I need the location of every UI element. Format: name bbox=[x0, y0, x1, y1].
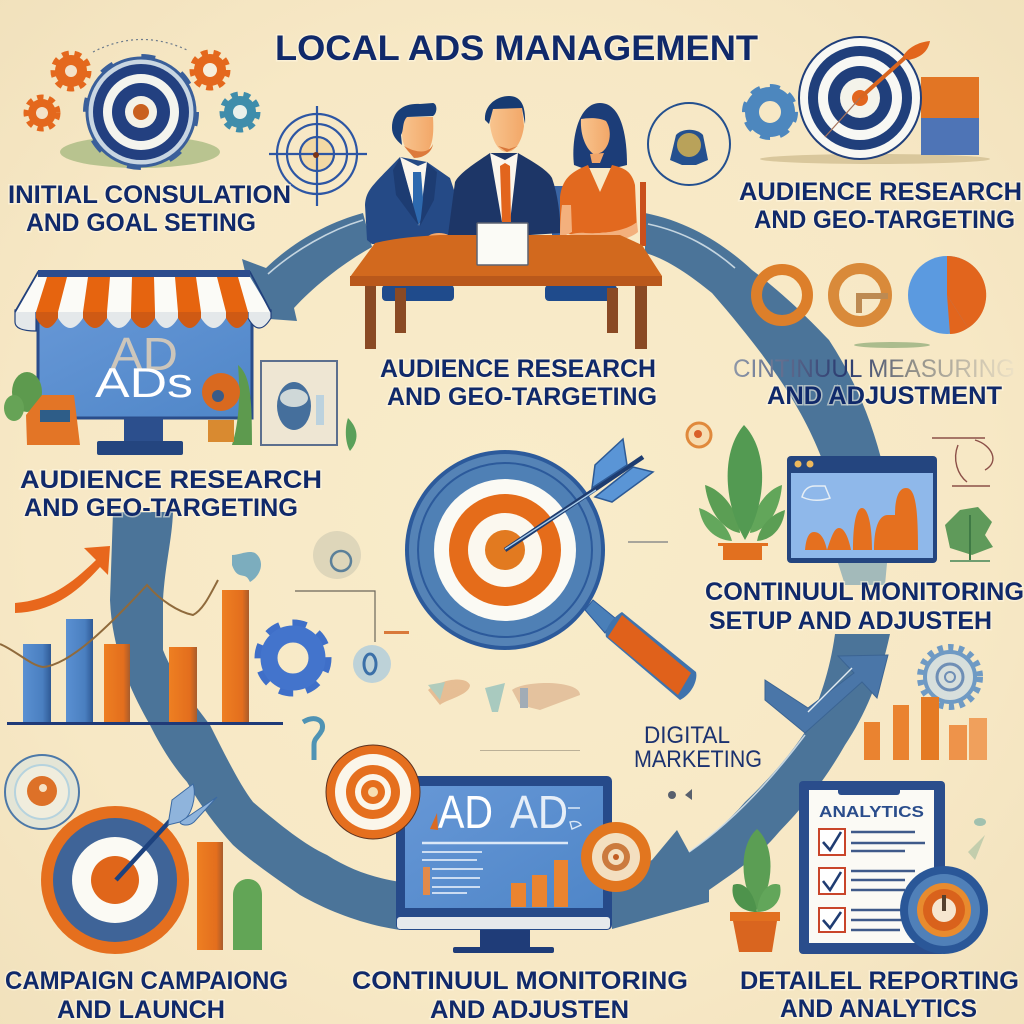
text: detailed reporting: DETAILEL REPORTING bbox=[740, 967, 1019, 995]
icon: small leaf bbox=[346, 418, 356, 451]
text: initial consultation: INITIAL CONSULATION bbox=[8, 181, 291, 209]
text: audience research left bbox=[20, 466, 322, 522]
text: continual monitoring bottom bbox=[352, 967, 688, 1024]
icon: monitor with area chart bbox=[787, 456, 937, 563]
icon: crosshair bbox=[269, 106, 367, 206]
icon: potted plant bbox=[699, 425, 785, 560]
icon: potted plant bottom bbox=[730, 829, 781, 952]
bar chart: growth bars with arrow bbox=[0, 546, 283, 725]
icon: central magnifier target bbox=[405, 439, 696, 700]
check items bbox=[819, 829, 925, 932]
illustration: storefront ads monitor: AD bbox=[110, 328, 178, 380]
illustration: ad monitor bbox=[396, 776, 612, 953]
text: digital marketing: MARKETING bbox=[634, 746, 762, 773]
text: audience research centre bbox=[380, 355, 657, 411]
text: detailed reporting: AND ANALYTICS bbox=[780, 995, 977, 1023]
icon: faint map marks bbox=[428, 680, 580, 751]
icon: check arrow bbox=[765, 655, 888, 733]
text: continual monitoring right bbox=[705, 578, 1024, 635]
icon: orange coin bbox=[581, 822, 651, 892]
text: campaign launch bbox=[5, 967, 288, 1024]
icon: orange eye badge bbox=[202, 365, 252, 445]
text: campaign launch: AND LAUNCH bbox=[57, 996, 225, 1024]
illustration: ad monitor: AD bbox=[510, 786, 568, 838]
icon: blue gear bbox=[261, 626, 325, 690]
icon: faint sketch bbox=[932, 438, 993, 486]
icon: pale orb bbox=[5, 755, 79, 829]
icon: basket with plant bbox=[4, 372, 80, 445]
text: campaign launch: CAMPAIGN CAMPAIONG bbox=[5, 967, 288, 995]
icon: gauge badge bbox=[900, 866, 988, 954]
circular process arrow bbox=[110, 213, 890, 930]
text: audience research top right: AND GEO-TARGETING bbox=[754, 206, 1015, 234]
person: woman bbox=[556, 103, 638, 248]
icon: location badge circle bbox=[648, 103, 730, 185]
icon: faint connector and small badges bbox=[232, 531, 409, 760]
text: initial consultation bbox=[8, 181, 291, 237]
person: left man bbox=[365, 103, 454, 247]
text: digital marketing: DIGITAL bbox=[644, 722, 730, 749]
illustration: ad monitor: AD bbox=[438, 786, 493, 838]
illustration: team at table bbox=[350, 96, 662, 349]
icons: O, G and pie chart bbox=[756, 256, 986, 348]
icon: orange target bbox=[326, 745, 420, 839]
icon: faint dots bbox=[628, 541, 692, 800]
text: audience research left: AND GEO-TARGETING bbox=[24, 494, 298, 522]
icon: top-left target with gears bbox=[27, 39, 257, 168]
panel: analytics clipboard bbox=[799, 781, 945, 954]
panel: analytics clipboard: ANALYTICS bbox=[819, 804, 924, 821]
text: audience research centre: AUDIENCE RESEARCH bbox=[380, 355, 656, 383]
text: continual measuring: CINTINUUL MEASURING bbox=[733, 355, 1015, 383]
text: continual monitoring right: SETUP AND ADJUSTEH bbox=[709, 607, 992, 635]
text: continual monitoring bottom: CONTINUUL MONITORING bbox=[352, 967, 688, 995]
icon: small orange coin bbox=[687, 423, 711, 447]
text: digital marketing bbox=[634, 722, 762, 773]
bar chart: orange bars with gear bbox=[864, 649, 987, 760]
illustration: storefront ads monitor: ADs bbox=[95, 359, 193, 406]
icon: small shrub bbox=[945, 507, 993, 561]
person: middle man bbox=[448, 96, 561, 235]
text: detailed reporting bbox=[740, 967, 1019, 1023]
text: audience research centre: AND GEO-TARGETING bbox=[387, 383, 657, 411]
text: audience research top right bbox=[739, 178, 1022, 234]
text: continual measuring bbox=[733, 355, 1015, 410]
text: audience research left: AUDIENCE RESEARCH bbox=[20, 466, 322, 494]
text: continual monitoring right: CONTINUUL MONITORING bbox=[705, 578, 1024, 606]
text: initial consultation: AND GOAL SETING bbox=[26, 209, 256, 237]
text: audience research top right: AUDIENCE RESEARCH bbox=[739, 178, 1022, 206]
icon: faint teal marks bbox=[968, 818, 986, 860]
title: LOCAL ADS MANAGEMENT bbox=[275, 29, 758, 68]
icon: bottom-left target with arrow and bars bbox=[41, 784, 262, 954]
awning bbox=[15, 270, 271, 331]
icon: appliance box bbox=[261, 361, 337, 445]
icon: top-right target with arrow, gear and blocks bbox=[746, 37, 990, 164]
text: continual monitoring bottom: AND ADJUSTEN bbox=[430, 996, 629, 1024]
text: continual measuring: AND ADJUSTMENT bbox=[767, 382, 1002, 410]
illustration: storefront ads monitor bbox=[15, 270, 271, 455]
